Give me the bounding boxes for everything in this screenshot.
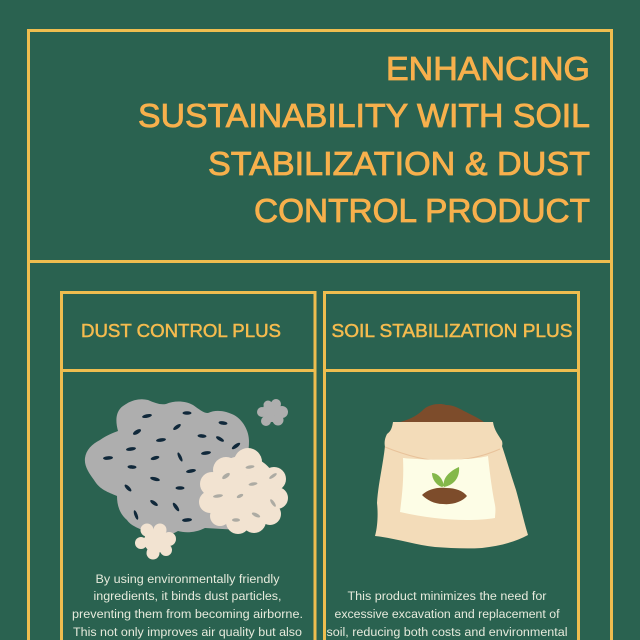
title: ENHANCING (386, 50, 590, 87)
bag neck (385, 422, 502, 461)
soil mound (422, 488, 467, 504)
body text: dust control: By using environmentally friendly (96, 572, 280, 586)
bag body (375, 446, 528, 548)
body text: soil stabilization: soil, reducing both costs and environmental (326, 625, 568, 639)
panel frame: dust control (62, 292, 315, 640)
body text: soil stabilization: excessive excavation and replacement of (334, 607, 560, 621)
body text: soil stabilization (326, 589, 568, 639)
large cream cloud (199, 448, 288, 534)
dust specks dark (103, 411, 241, 522)
body text: dust control: ingredients, it binds dust particles, (94, 589, 282, 603)
title divider (28, 260, 612, 263)
icon: soil bag (375, 404, 528, 548)
title (138, 50, 590, 229)
sprout leaves (432, 467, 459, 487)
body text: dust control: This not only improves air quality but also (73, 625, 302, 639)
body text: dust control (72, 572, 303, 639)
title: STABILIZATION & DUST (208, 145, 590, 182)
soil pile (400, 404, 484, 422)
body text: soil stabilization: This product minimizes the need for (348, 589, 546, 603)
panel: soil stabilization plus (324, 292, 578, 640)
heading: soil stabilization plus: SOIL STABILIZATION PLUS (332, 321, 572, 341)
icon: dust clouds (85, 399, 288, 560)
panel: dust control plus (62, 292, 315, 640)
label patch (400, 456, 495, 520)
panel frame: soil stabilization (324, 292, 578, 640)
body text: dust control: preventing them from becoming airborne. (72, 607, 303, 621)
heading: dust control plus: DUST CONTROL PLUS (81, 321, 281, 341)
small cream cloud (135, 524, 176, 560)
title: CONTROL PRODUCT (254, 192, 590, 229)
cream specks (213, 465, 278, 522)
small grey cloud (257, 399, 288, 426)
bag fold line (385, 447, 500, 461)
large grey cloud (85, 399, 249, 535)
title: SUSTAINABILITY WITH SOIL (138, 97, 590, 134)
